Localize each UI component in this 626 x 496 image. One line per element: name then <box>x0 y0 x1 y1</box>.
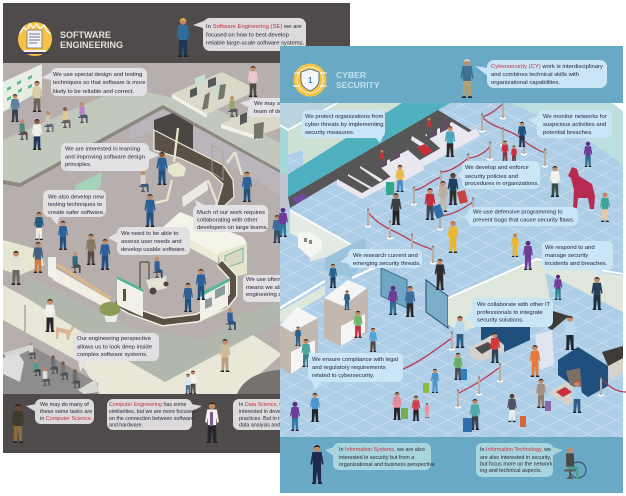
glass door panel <box>381 268 407 308</box>
person: reporter on phone <box>460 59 474 98</box>
heading: cyber security <box>336 70 380 90</box>
white top corner <box>612 103 623 111</box>
callout: security policies: We develop and enforce <box>465 165 529 171</box>
luggage <box>386 182 551 432</box>
booth: passport control two <box>280 307 318 374</box>
callout: data science: data analysis and e <box>239 422 285 428</box>
sage floor strip <box>25 275 280 382</box>
wall white top <box>290 210 352 245</box>
callout: information systems: organizational and business perspective <box>339 462 435 468</box>
callout: monitor networks: We monitor networks for <box>543 114 607 120</box>
lower conveyor belt <box>116 263 233 322</box>
callout: collaborating on large teams <box>193 200 268 232</box>
callout: legal compliance: We ensure compliance with legal <box>312 357 398 363</box>
walkway edge shadow <box>3 105 280 187</box>
callout: defensive programming: We use defensive programming to <box>473 210 563 216</box>
left lobby wall <box>3 240 44 275</box>
callout: testing techniques: testing techniques to <box>48 202 103 208</box>
callout: monitor networks <box>528 110 612 138</box>
icon: trojan horse <box>568 167 595 209</box>
callout: monitor networks: potential breaches. <box>543 130 593 136</box>
callout: respond to incidents: incidents and breaches. <box>545 261 608 267</box>
callout: engineering perspective: Our engineering perspective <box>77 336 152 342</box>
plant <box>100 302 120 322</box>
callout: research threats: We research current and <box>353 253 418 259</box>
callout: collaborating on large teams: Much of our work requires <box>197 210 265 216</box>
bus interior <box>3 342 99 394</box>
callout: computer science <box>26 399 94 424</box>
dog <box>56 326 74 340</box>
callout: software design principles: principles. <box>65 162 92 168</box>
icon: security shield badge <box>293 64 327 96</box>
inner room wall <box>130 109 280 195</box>
callout: team of developers: We may sometimes <box>254 101 306 107</box>
translucent window <box>325 237 366 278</box>
person: woman with handbag <box>310 445 324 484</box>
callout: research threats <box>340 249 422 268</box>
central white room top <box>163 212 247 255</box>
person: student in brown <box>11 404 25 443</box>
person: lab coat scientist <box>205 402 219 443</box>
callout: cybersecurity intro: Cybersecurity (CY) work is interdisciplinary <box>491 64 603 70</box>
heading: cyber security: CYBER <box>336 70 367 80</box>
callout: information systems <box>325 443 435 470</box>
callout: engineering perspective <box>73 333 159 372</box>
central room left wall <box>190 240 218 263</box>
callout: security policies <box>457 161 540 189</box>
callout: collaborate with IT professionals <box>463 298 553 327</box>
panel: cyber security <box>278 46 626 493</box>
white wall top <box>280 103 337 130</box>
people: software engineering <box>10 66 282 394</box>
counter top <box>55 263 111 300</box>
callout: software design principles: and improving software design <box>65 154 145 160</box>
planning wall board <box>3 64 42 112</box>
panel background <box>280 46 623 493</box>
right wall white top <box>448 259 623 298</box>
callout: engineering practices: means we also <box>246 285 286 291</box>
person: hard hat engineer <box>176 18 190 57</box>
callout: testing techniques <box>43 190 106 225</box>
forklift <box>140 262 168 294</box>
icon: security shield badge: 1 <box>308 76 313 85</box>
callout: collaborate with IT professionals: professionals to integrate <box>477 310 544 316</box>
callout: information systems: In Information Systems, we are also <box>339 447 425 453</box>
heading: software engineering <box>60 30 123 50</box>
callout: defensive programming: prevent bugs that cause security flaws. <box>473 218 575 224</box>
upper right wall <box>510 103 623 165</box>
callout: protect organizations <box>302 110 385 143</box>
far corner wall <box>280 103 337 130</box>
callout: legal compliance: related to cybersecurity. <box>312 373 374 379</box>
callout: design and testing: likely to be reliable and correct. <box>53 89 135 95</box>
callout: cybersecurity intro: organizational capabilities. <box>491 80 560 86</box>
callout: research threats: emerging security threats. <box>353 261 421 267</box>
cream pavement right <box>165 335 280 394</box>
grey column <box>280 172 288 210</box>
callout: computer science: We may do many of <box>40 402 89 408</box>
red suitcase on belt <box>417 144 433 156</box>
callout: respond to incidents: We respond to and <box>545 245 595 251</box>
callout: collaborate with IT professionals: security solutions. <box>477 318 524 324</box>
baggage conveyor <box>288 110 476 208</box>
callout: software engineering intro <box>193 18 306 51</box>
booth: passport control one <box>324 280 368 346</box>
wall AC unit <box>298 232 322 258</box>
callout: computer engineering: similarities, but we are more focused <box>109 409 195 415</box>
callout: information technology <box>476 443 563 477</box>
callout: collaborating on large teams: developers on large teams. <box>197 225 268 231</box>
callout: protect organizations: We protect organizations from <box>305 114 384 120</box>
person: wheelchair user <box>564 447 586 479</box>
heading: software engineering: ENGINEERING <box>60 40 123 50</box>
teal check-in wall <box>287 103 450 197</box>
callout: design and testing: We use special design and testing <box>53 72 142 78</box>
callout: computer science: in Computer Science. <box>40 416 93 422</box>
central room window <box>225 248 243 268</box>
robot arms <box>155 128 242 210</box>
callout: user needs: assess user needs and <box>121 239 182 245</box>
callout: cybersecurity intro: and combines technical skills with <box>491 72 579 78</box>
check-in desks <box>337 122 480 199</box>
callout: defensive programming <box>464 207 578 226</box>
callout: data science: practices. But in the <box>239 416 286 422</box>
callout: computer science: these same tasks are <box>40 409 92 415</box>
bottom bar <box>280 437 623 493</box>
people: cyber security <box>278 118 610 431</box>
callout: respond to incidents: manage security <box>545 253 588 259</box>
machine tower <box>154 113 193 150</box>
panel background <box>3 3 350 453</box>
car <box>237 370 280 394</box>
callout: monitor networks: suspicious activities and <box>543 122 606 128</box>
callout: computer engineering <box>107 399 202 430</box>
black triangle scanner <box>548 311 569 330</box>
callout: engineering practices: engineering skills <box>246 292 291 298</box>
callout: data science <box>233 399 303 430</box>
floor lamp post <box>24 305 26 332</box>
callout: engineering practices <box>243 275 303 302</box>
callout: protect organizations: security measures. <box>305 130 355 136</box>
icon: software document badge <box>18 22 52 56</box>
callout: software design principles: We are interested in learning <box>65 146 140 152</box>
callout: respond to incidents <box>542 241 613 277</box>
callout: user needs: develop usable software. <box>121 247 187 253</box>
callout: user needs: We need to be able to <box>121 231 179 237</box>
heading: software engineering: SOFTWARE <box>60 30 111 40</box>
control panel <box>182 180 208 207</box>
light teal column <box>280 127 288 175</box>
callout: collaborating on large teams: collaborating with other <box>197 218 258 224</box>
security scanner one <box>470 327 530 362</box>
callout: engineering perspective: complex software systems. <box>77 352 148 358</box>
lower left white wall top <box>280 265 380 308</box>
callout: testing techniques: We also develop new <box>48 194 105 200</box>
callout: engineering perspective: allows us to look deep inside <box>77 344 153 350</box>
callout: computer engineering: on the connection between software <box>109 416 194 422</box>
callout: design and testing: techniques so that software is more <box>53 80 146 86</box>
callout: information technology: ing and technical aspects. <box>480 468 542 474</box>
curved conveyor wall <box>154 130 234 208</box>
metal detector <box>535 330 554 370</box>
callout: information technology: but focus more on the network <box>480 462 553 468</box>
purple suitcase <box>292 193 307 204</box>
callout: team of developers <box>240 98 308 117</box>
upper left building wall <box>290 210 352 262</box>
callout: testing techniques: create safer software. <box>48 210 105 216</box>
callout: security policies: procedures in organizations. <box>465 181 539 187</box>
header bar <box>3 3 350 63</box>
callout: computer engineering: Computer Engineering has some <box>109 402 186 408</box>
callout: design and testing <box>41 68 147 96</box>
callout: data science: In Data Science, we are <box>239 402 295 408</box>
bottom bar <box>3 394 280 453</box>
reception counter <box>53 268 110 310</box>
callout: software design principles <box>61 143 160 171</box>
header bar <box>280 46 623 103</box>
security scanner two <box>548 346 623 406</box>
check-in monitors <box>377 120 450 170</box>
raised walkway band <box>3 87 280 183</box>
callout: legal compliance <box>308 353 403 390</box>
heading: cyber security: SECURITY <box>336 80 380 90</box>
callout: cybersecurity intro <box>475 60 607 88</box>
ropes and stanchions <box>365 100 626 409</box>
callout: security policies: security policies and <box>465 174 518 180</box>
callout: information technology: are also interested in security, <box>480 455 552 461</box>
right room wall <box>448 258 623 332</box>
cream pavement <box>3 285 187 394</box>
callout: data science: interested in developing <box>239 409 295 415</box>
callout: computer engineering: and hardware. <box>109 422 143 428</box>
callout: software engineering intro: reliable large-scale software systems. <box>206 40 305 46</box>
callout: user needs <box>108 227 190 255</box>
machine base <box>168 162 186 177</box>
tiled floor <box>280 103 623 437</box>
glass frame <box>212 145 223 180</box>
lower conveyor belt edge <box>116 263 233 322</box>
callout: engineering practices: We use often <box>246 277 281 283</box>
callout: information technology: In Information Technology, we <box>480 447 551 453</box>
callout: team of developers: team of developers <box>254 109 304 115</box>
callout: protect organizations: cyber threats by implementing <box>305 122 384 128</box>
upper left sage wall <box>288 103 402 165</box>
callout: software engineering intro: In Software Engineering (SE) we are <box>206 24 302 30</box>
callout: legal compliance: and regulatory requirements <box>312 365 386 371</box>
central room right wall <box>218 243 247 277</box>
counter pillar <box>48 257 56 280</box>
lower left wall face <box>280 286 325 322</box>
display panels <box>117 276 230 322</box>
glass door right <box>426 280 448 328</box>
callout: software engineering intro: focused on how to best develop <box>206 32 290 38</box>
callout: collaborate with IT professionals: We collaborate with other IT <box>477 302 551 308</box>
panel: software engineering <box>3 3 350 453</box>
mint wall block <box>75 172 102 198</box>
desk area: workstations <box>172 72 280 140</box>
callout: information systems: interested in security but from a <box>339 455 414 461</box>
